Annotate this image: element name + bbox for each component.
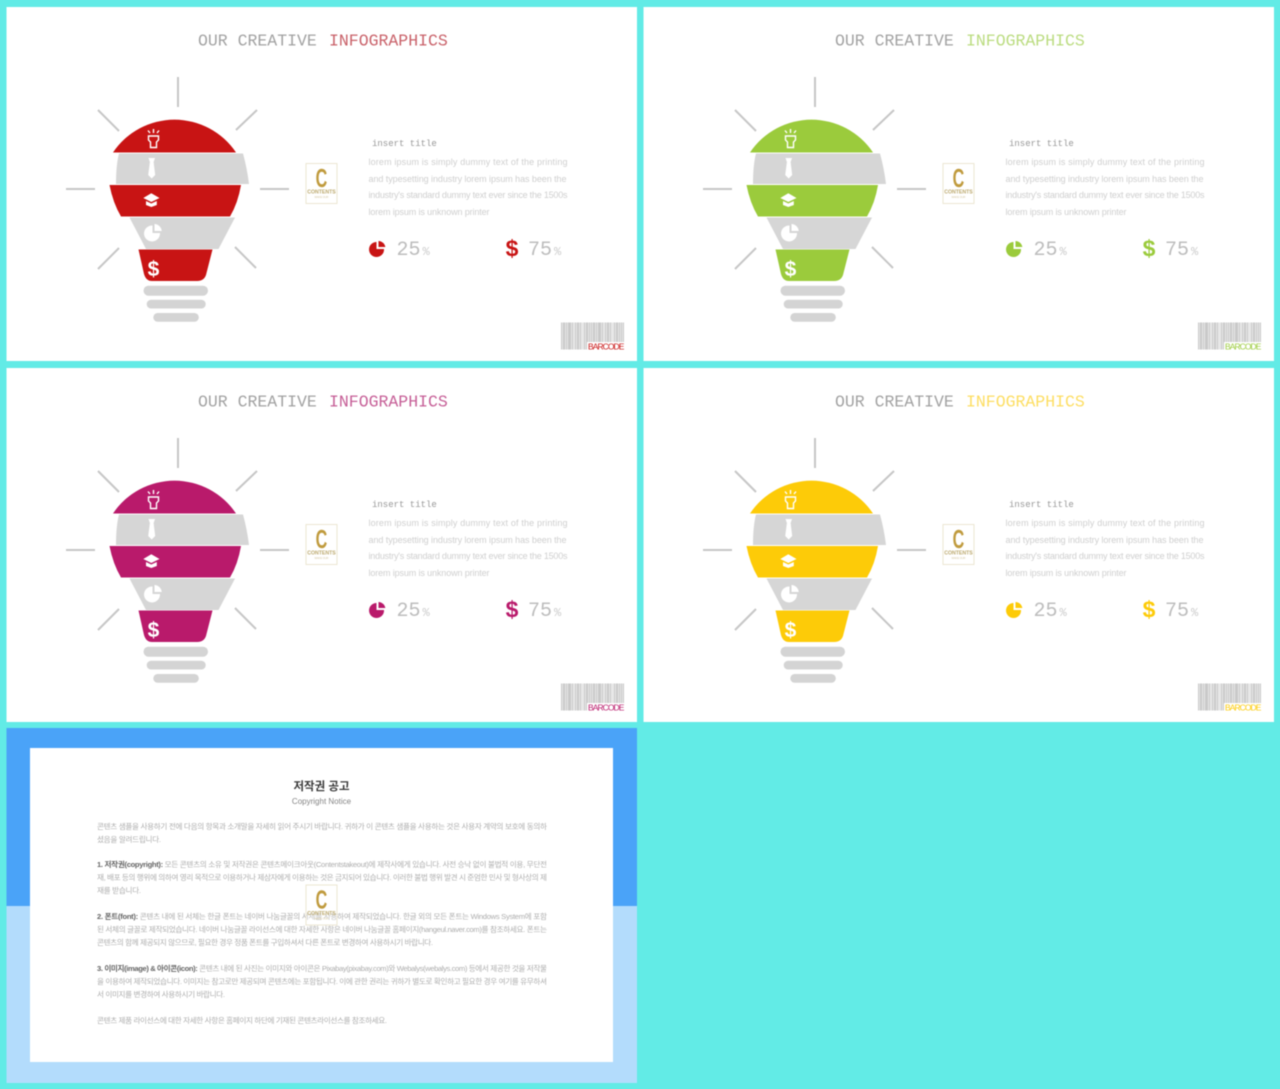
- logo: MAKE OUR: [315, 556, 329, 560]
- logo: CONTENTS: [307, 190, 336, 196]
- text block: [1006, 139, 1205, 217]
- icon: light rays: [66, 77, 289, 269]
- text block: insert title: [372, 500, 437, 510]
- panel: red infographic: [6, 7, 637, 361]
- logo: [306, 163, 337, 204]
- stat: 25 percent: 25: [396, 600, 421, 623]
- icon: bulb base: [144, 286, 208, 322]
- text block: insert title: [1009, 139, 1074, 149]
- title: INFOGRAPHICS: [966, 32, 1085, 50]
- icon: graduation cap: [780, 193, 796, 207]
- title: INFOGRAPHICS: [966, 392, 1085, 412]
- title: INFOGRAPHICS: [329, 392, 448, 412]
- stat: 75 percent: $: [506, 236, 519, 262]
- text block: font: [97, 911, 547, 947]
- text block: lorem ipsum is simply dummy text of the printing: [368, 157, 568, 167]
- logo: C: [953, 524, 965, 554]
- text block: font: 콘텐츠의 함께 제공되지 않으므로, 필요한 경우 정품 폰트를 구입하셔서 다른 폰트로 변경하여 사용하시기 바랍니다.: [97, 937, 433, 947]
- text block: industry's standard dummy text ever since the 1500s: [1006, 551, 1205, 561]
- stat: 75 percent: %: [554, 245, 562, 259]
- logo watermark: C: [316, 884, 328, 915]
- barcode: BARCODE: [588, 702, 625, 712]
- stat: 75 percent: 75: [528, 600, 552, 623]
- title: OUR CREATIVE: [198, 32, 317, 50]
- stat: 75 percent: [506, 236, 562, 262]
- text block: copyright: 1. 저작권(copyright): 모든 콘텐츠의 소유 및 저작권은 콘텐츠메이크아웃(Contentstakeout)에 제작사에게 있습니다. 사전 승낙 없이 불법적 이용, 무단전: [97, 859, 547, 869]
- logo: CONTENTS: [944, 190, 973, 196]
- logo: [306, 524, 337, 564]
- icon: flashlight: [785, 129, 796, 148]
- stat: 75 percent: [1143, 596, 1199, 623]
- text block: industry's standard dummy text ever since the 1500s: [1006, 190, 1205, 200]
- icon: graduation cap: [143, 554, 160, 568]
- icon: tie: [785, 519, 792, 540]
- text block: font: 된 서체의 글꼴로 제작되었습니다. 네이버 나눔글꼴 라이선스에 대한 자세한 사항은 네이버 나눔글꼴 홈페이지(hangeul.naver.com)를 참조하세요. 폰트는: [97, 924, 547, 934]
- icon: pie chart: [781, 224, 799, 241]
- icon: dollar: $: [148, 258, 160, 281]
- icon: dollar: $: [785, 258, 797, 281]
- icon: light rays: [703, 438, 926, 630]
- text block: insert title: [372, 139, 437, 149]
- barcode: [1198, 684, 1262, 712]
- panel: green infographic: [644, 7, 1274, 361]
- text block: lorem ipsum is unknown printer: [1006, 207, 1126, 217]
- title: OUR CREATIVE: [835, 392, 954, 412]
- text block: image and icon: 3. 이미지(image) & 아이콘(icon): 콘텐츠 내에 된 사진는 이미지와 아이콘은 Pixabay(pixabay.com)와 Webalys(webalys.com) 등에서 제공한 것을 저작물: [97, 963, 547, 973]
- text block: copyright: [97, 859, 547, 895]
- barcode: [561, 322, 625, 352]
- logo: CONTENTS: [307, 550, 336, 556]
- logo watermark: MAKE OUR: [315, 916, 329, 920]
- icon: tie: [785, 158, 792, 178]
- stat: 75 percent: %: [1191, 606, 1199, 620]
- stat: 25 percent: 25: [1034, 239, 1058, 262]
- logo: C: [316, 524, 328, 554]
- text block: license note: 콘텐츠 제품 라이선스에 대한 자세한 사항은 홈페이지 하단에 기재된 콘텐츠라이선스를 참조하세요.: [97, 1015, 387, 1025]
- stat: 75 percent: $: [1143, 236, 1156, 262]
- icon: dollar: $: [785, 619, 797, 642]
- chart: light bulb segments: [746, 481, 886, 642]
- stat: 25 percent: [369, 239, 430, 262]
- icon: graduation cap: [143, 193, 160, 207]
- stat: 75 percent: $: [506, 596, 519, 622]
- text block: copyright: 재, 배포 등의 행위에 의하여 영리 목적으로 이용하거나 제삼자에게 이용하는 것은 금지되어 있습니다. 이러한 불법 행위 발견 시 준엄한 민사 및 형사상의 제: [97, 872, 547, 882]
- icon: bulb base: [144, 647, 208, 683]
- logo: MAKE OUR: [952, 195, 966, 199]
- stat: 25 percent: %: [422, 245, 430, 259]
- icon: flashlight: [785, 490, 796, 508]
- barcode: BARCODE: [1225, 702, 1262, 712]
- icon: tie: [148, 519, 155, 540]
- panel: copyright notice: [6, 728, 637, 1083]
- barcode: [1198, 322, 1262, 352]
- icon: flashlight: [148, 490, 159, 508]
- stat: 25 percent: %: [1060, 245, 1068, 259]
- logo: MAKE OUR: [315, 195, 329, 199]
- chart: light bulb segments: [110, 120, 249, 281]
- stat: 25 percent: 25: [1034, 600, 1058, 623]
- chart: light bulb segments: [746, 120, 886, 281]
- text block: insert title: [1009, 500, 1074, 510]
- subheading: Copyright Notice: [292, 797, 352, 806]
- icon: pie chart: [781, 585, 799, 602]
- text block: intro: 셨음을 알려드립니다.: [97, 834, 161, 844]
- text block: [368, 139, 568, 217]
- stat: 25 percent: %: [422, 606, 430, 620]
- stat: 75 percent: 75: [1165, 239, 1189, 262]
- stat: 75 percent: $: [1143, 596, 1156, 622]
- chart: light bulb segments: [110, 481, 249, 642]
- text block: and typesetting industry lorem ipsum has been the: [1006, 535, 1204, 545]
- title: OUR CREATIVE: [198, 392, 317, 412]
- stat: 75 percent: [506, 596, 562, 623]
- barcode: [561, 684, 625, 712]
- logo watermark: [306, 884, 337, 925]
- icon: bulb base: [780, 286, 845, 322]
- logo: C: [953, 163, 965, 193]
- barcode: BARCODE: [1225, 342, 1262, 352]
- stat: 25 percent: [1006, 239, 1068, 262]
- barcode: BARCODE: [588, 342, 625, 352]
- text block: [1006, 500, 1205, 578]
- icon: pie chart: [144, 224, 162, 241]
- logo: [943, 524, 974, 564]
- text block: image and icon: 을 이용하여 제작되었습니다. 이미지는 참고로만 제공되며 콘텐츠에는 포함됩니다. 이에 관한 권리는 귀하가 별도로 확인하고 필요한 경우 여기를 유무하셔: [97, 976, 547, 986]
- text block: lorem ipsum is simply dummy text of the printing: [1006, 518, 1204, 528]
- panel: magenta infographic: [6, 368, 637, 722]
- text block: lorem ipsum is unknown printer: [1006, 568, 1126, 578]
- text block: industry's standard dummy text ever since the 1500s: [368, 551, 568, 561]
- icon: graduation cap: [780, 554, 796, 568]
- stat: 75 percent: %: [554, 606, 562, 620]
- logo: CONTENTS: [944, 550, 973, 556]
- text block: intro: [97, 821, 547, 844]
- stat: 75 percent: [1143, 236, 1199, 262]
- heading: 저작권 공고: [293, 779, 350, 793]
- logo: MAKE OUR: [952, 556, 966, 560]
- text block: lorem ipsum is unknown printer: [368, 207, 490, 217]
- text block: and typesetting industry lorem ipsum has been the: [1006, 174, 1204, 184]
- text block: copyright: 재를 받습니다.: [97, 885, 141, 895]
- text block: industry's standard dummy text ever since the 1500s: [368, 190, 568, 200]
- icon: flashlight: [148, 129, 159, 148]
- text block: font: 2. 폰트(font): 콘텐츠 내에 된 서체는 한글 폰트는 네이버 나눔글꼴의 서체를 사용하여 제작되었습니다. 한글 외의 모든 폰트는 Windows System에 포함: [97, 911, 547, 921]
- stat: 75 percent: %: [1191, 245, 1199, 259]
- title: INFOGRAPHICS: [329, 32, 448, 50]
- panel: yellow infographic: [644, 368, 1274, 722]
- title: OUR CREATIVE: [835, 32, 954, 50]
- stat: 25 percent: 25: [396, 239, 421, 262]
- text block: [368, 500, 568, 578]
- text block: and typesetting industry lorem ipsum has been the: [368, 174, 566, 184]
- icon: bulb base: [780, 647, 845, 683]
- stat: 75 percent: 75: [528, 239, 552, 262]
- stat: 25 percent: [369, 600, 430, 623]
- stat: 75 percent: 75: [1165, 600, 1189, 623]
- text block: and typesetting industry lorem ipsum has been the: [368, 535, 566, 545]
- text block: image and icon: 서 이미지를 변경하여 사용하시기 바랍니다.: [97, 989, 225, 999]
- logo: [943, 163, 974, 204]
- stat: 25 percent: %: [1060, 606, 1068, 620]
- icon: tie: [148, 158, 155, 178]
- icon: dollar: $: [148, 619, 160, 642]
- text block: image and icon: [97, 963, 547, 999]
- icon: pie chart: [144, 585, 162, 602]
- stat: 25 percent: [1006, 600, 1068, 623]
- logo watermark: CONTENTS: [307, 911, 336, 917]
- text block: lorem ipsum is unknown printer: [368, 568, 490, 578]
- text block: lorem ipsum is simply dummy text of the printing: [1006, 157, 1204, 167]
- icon: light rays: [703, 77, 926, 269]
- icon: light rays: [66, 438, 289, 630]
- logo: C: [316, 163, 328, 193]
- text block: lorem ipsum is simply dummy text of the printing: [368, 518, 568, 528]
- text block: intro: 콘텐츠 샘플을 사용하기 전에 다음의 항목과 소개말을 자세히 읽어 주시기 바랍니다. 귀하가 이 콘텐츠 샘플을 사용하는 것은 사용자 계약의 보호에 동의하: [97, 821, 547, 831]
